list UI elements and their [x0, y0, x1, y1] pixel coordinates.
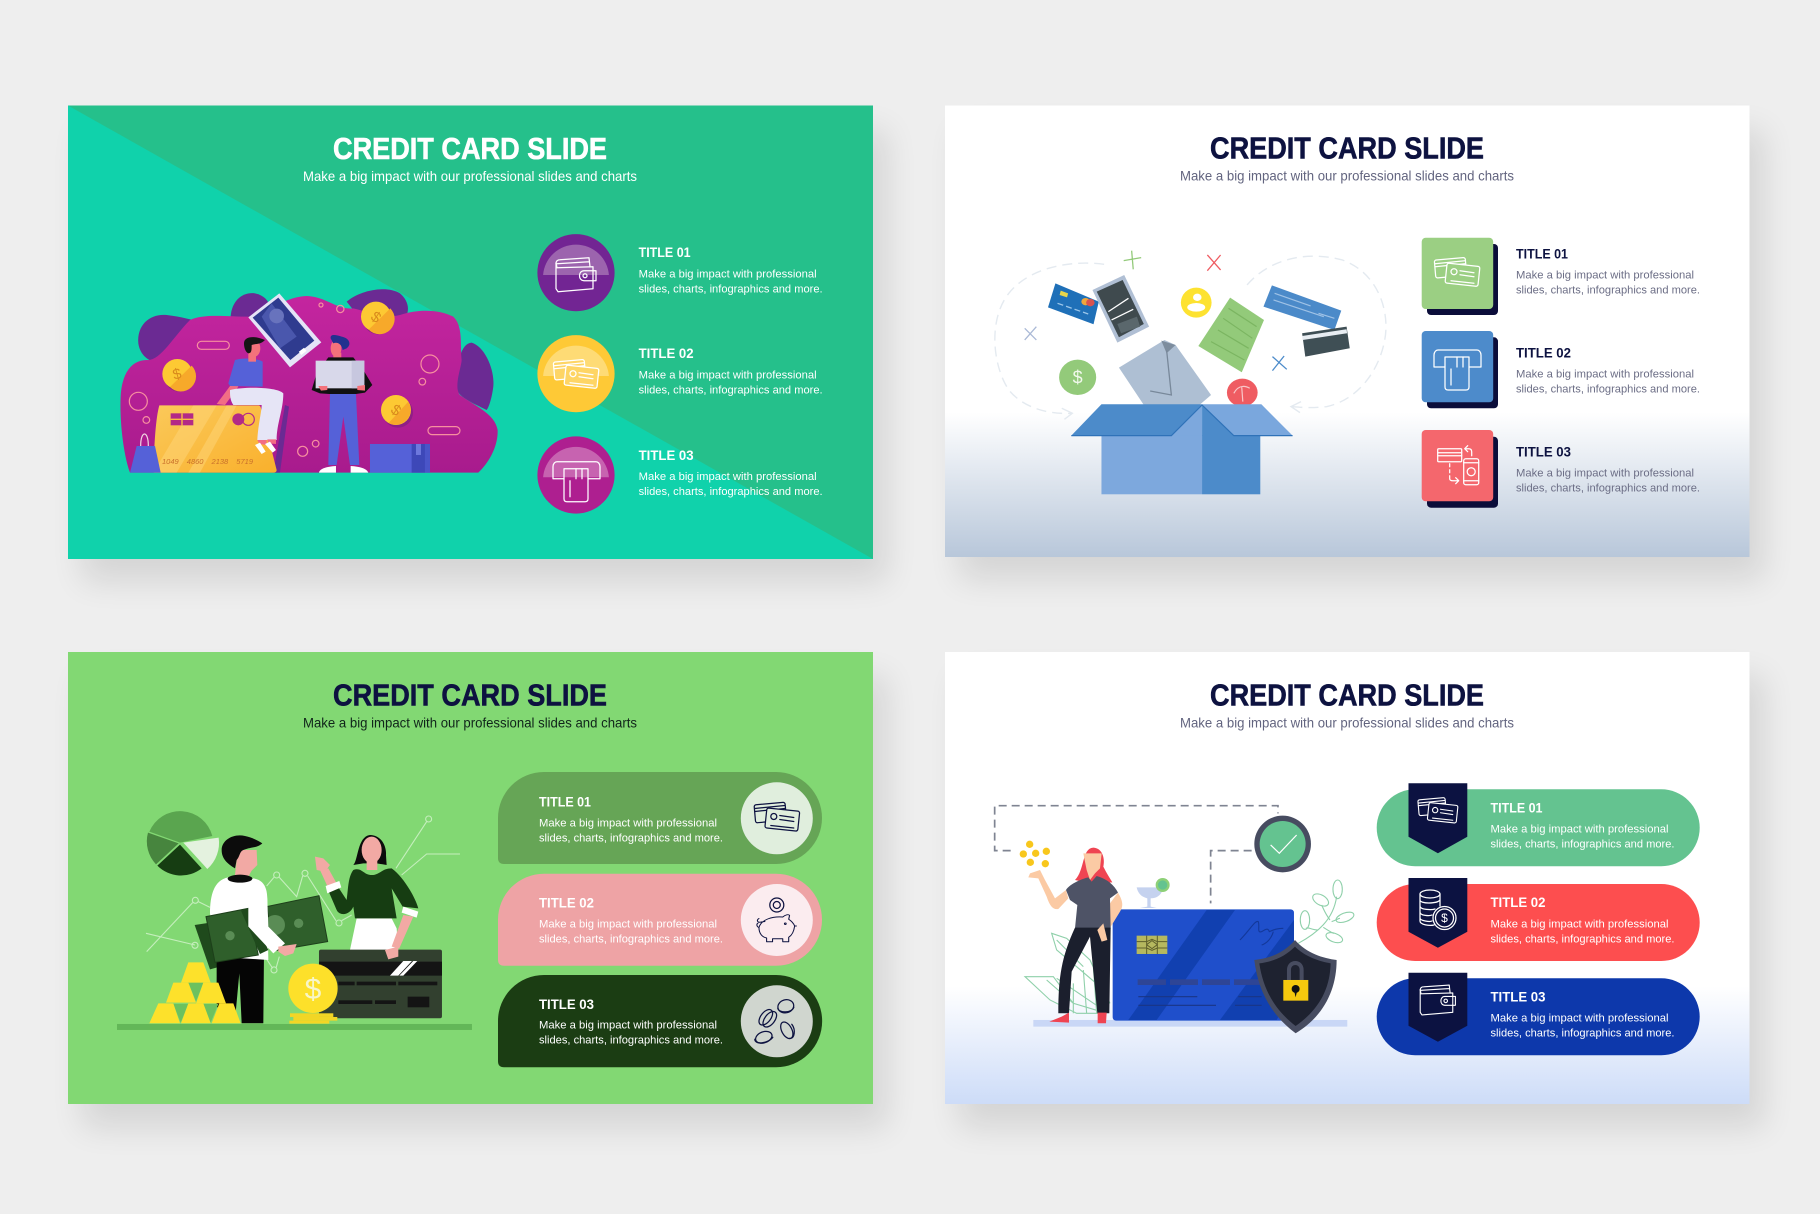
item 01: green square with cards icon — [1422, 238, 1498, 315]
item 03: blue pill with banner: Make a big impact with professional — [1490, 1013, 1668, 1025]
subheading: Make a big impact with our professional slides and charts — [1180, 714, 1514, 730]
item 01: green pill: Make a big impact with professional — [539, 817, 717, 829]
item 01: green pill — [498, 772, 822, 864]
coin dollar signs — [171, 308, 405, 420]
panel: white slide with box — [945, 106, 1764, 580]
item 02 text: TITLE 02 — [639, 345, 694, 361]
item 01: green pill with banner: slides, charts, infographics and more. — [1490, 839, 1674, 851]
panel shadow — [82, 130, 887, 582]
subheading: Make a big impact with our professional slides and charts — [303, 168, 637, 184]
heading: CREDIT CARD SLIDE — [1210, 130, 1484, 166]
item 02: red pill with banner: Make a big impact with professional — [1490, 918, 1668, 930]
item 01: green pill: slides, charts, infographics and more. — [539, 832, 723, 844]
coin dollar signs: $ — [171, 365, 184, 384]
item 01 text: slides, charts, infographics and more. — [1516, 285, 1700, 297]
diagonal light teal area — [68, 106, 873, 559]
subheading: Make a big impact with our professional slides and charts — [1180, 168, 1514, 184]
item 03: blue pill with banner — [1377, 973, 1700, 1055]
item 03 text: Make a big impact with professional — [1516, 468, 1694, 480]
illustration: open box with flying items — [995, 251, 1386, 494]
item 01: green pill with banner: TITLE 01 — [1490, 800, 1543, 816]
panel: teal slide — [68, 106, 887, 582]
item 03 text: TITLE 03 — [1516, 444, 1571, 460]
gold coin dollar sign: $ — [305, 973, 322, 1006]
item 03: magenta circle with ATM icon — [537, 436, 615, 514]
item 03 text: slides, charts, infographics and more. — [639, 486, 823, 498]
item 03: dark green pill: slides, charts, infographics and more. — [539, 1035, 723, 1047]
item 02: red pill with banner: TITLE 02 — [1490, 894, 1546, 910]
subheading: Make a big impact with our professional slides and charts — [303, 714, 637, 730]
item 02 text: TITLE 02 — [1516, 345, 1571, 361]
item 02: red pill with banner: $ — [1441, 911, 1448, 925]
green coin dollar sign: $ — [1073, 368, 1083, 388]
item 02: yellow circle with cards icon — [537, 335, 615, 412]
heading: CREDIT CARD SLIDE — [1210, 678, 1484, 712]
item 02: pink pill: TITLE 02 — [539, 894, 594, 910]
item 02 text — [1516, 345, 1700, 396]
coin dollar signs: $ — [367, 308, 385, 327]
coin dollar signs: $ — [387, 401, 405, 420]
slide background — [945, 106, 1750, 557]
heading: CREDIT CARD SLIDE — [333, 678, 607, 712]
item 01: green pill with banner — [1377, 783, 1700, 866]
item 03: blue pill with banner: TITLE 03 — [1490, 989, 1546, 1005]
slide background — [945, 652, 1750, 1104]
card number: 1049 4860 2138 5719 — [162, 457, 254, 466]
illustration: two people with money and card — [117, 811, 472, 1030]
slide background — [68, 652, 873, 1104]
panel shadow — [959, 130, 1764, 580]
item 01 text: TITLE 01 — [639, 244, 691, 260]
item 03: dark green pill: Make a big impact with professional — [539, 1020, 717, 1032]
item 02: pink pill: Make a big impact with professional — [539, 918, 717, 930]
item 02: blue square with ATM icon — [1422, 331, 1498, 408]
item 03 text: TITLE 03 — [639, 447, 694, 463]
panel: green slide — [68, 652, 887, 1128]
item 01 text: slides, charts, infographics and more. — [639, 283, 823, 295]
item 01 text: Make a big impact with professional — [1516, 270, 1694, 282]
item 01 text: TITLE 01 — [1516, 246, 1568, 262]
item 02 text — [639, 345, 823, 397]
item 03: red square with transfer icon — [1422, 430, 1498, 508]
item 01: green pill with banner: Make a big impact with professional — [1490, 824, 1668, 836]
item 02 text: slides, charts, infographics and more. — [1516, 384, 1700, 396]
heading: CREDIT CARD SLIDE — [333, 131, 607, 166]
item 02 text: Make a big impact with professional — [1516, 369, 1694, 381]
item 02: pink pill: slides, charts, infographics and more. — [539, 933, 723, 945]
panel shadow — [959, 676, 1764, 1128]
item 01: purple circle with wallet icon — [537, 234, 615, 311]
item 02 text: Make a big impact with professional — [639, 370, 817, 382]
illustration: woman, credit card and security shield — [995, 806, 1355, 1033]
illustration: people with credit card on magenta blob — [120, 289, 498, 473]
item 03 text: Make a big impact with professional — [639, 471, 817, 483]
item 01 text: Make a big impact with professional — [639, 268, 817, 280]
panel shadow — [82, 676, 887, 1128]
item 01 text — [639, 244, 823, 295]
item 03 text — [639, 447, 823, 498]
item 03: dark green pill: TITLE 03 — [539, 996, 594, 1012]
slide background dark green — [68, 106, 873, 559]
item 02 text: slides, charts, infographics and more. — [639, 385, 823, 397]
item 03 text: slides, charts, infographics and more. — [1516, 483, 1700, 495]
item 01: green pill: TITLE 01 — [539, 793, 591, 809]
panel: white slide with card and shield — [945, 652, 1764, 1128]
item 03: dark green pill — [498, 975, 822, 1067]
item 03 text — [1516, 444, 1700, 495]
item 02: red pill with banner: slides, charts, infographics and more. — [1490, 933, 1674, 945]
item 02: pink pill — [498, 874, 822, 966]
item 03: blue pill with banner: slides, charts, infographics and more. — [1490, 1028, 1674, 1040]
item 02: red pill with banner — [1377, 878, 1700, 961]
item 01 text — [1516, 246, 1700, 297]
